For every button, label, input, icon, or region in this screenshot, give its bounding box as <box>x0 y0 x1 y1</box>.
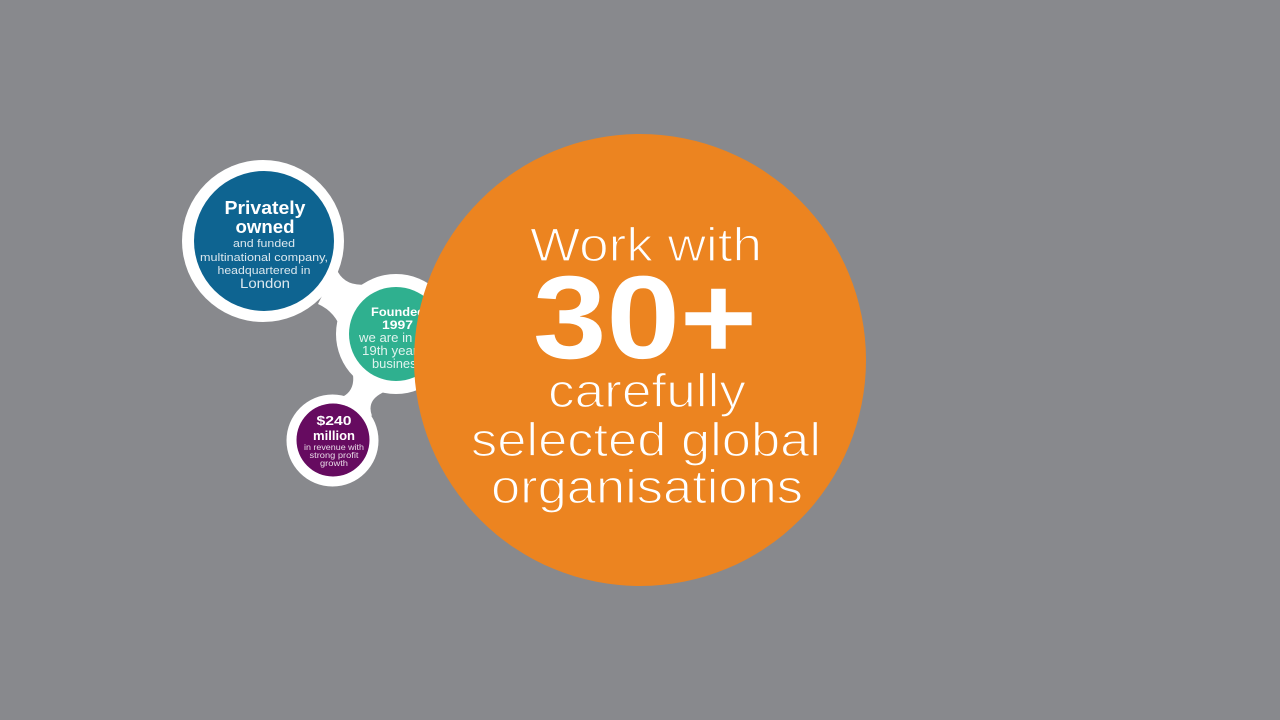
node: privately owned: owned <box>236 217 294 237</box>
panel: orange circle <box>414 134 866 586</box>
description: founded: 19th year of <box>362 344 433 358</box>
description: privately owned: multinational company, <box>200 252 328 264</box>
description: founded: we are in our <box>358 331 435 345</box>
heading: founded: Founded <box>371 305 425 319</box>
text: selected global: selected global <box>471 413 821 466</box>
description: founded: business <box>372 357 423 371</box>
description: revenue: growth <box>320 459 348 468</box>
description: revenue <box>304 443 364 468</box>
white connector network <box>318 268 384 416</box>
description: privately owned: London <box>240 275 290 291</box>
description: founded <box>358 331 435 371</box>
node: privately owned <box>182 160 344 322</box>
heading: revenue: $240 <box>316 413 352 428</box>
description: privately owned <box>200 238 328 291</box>
node: revenue: million <box>313 428 355 443</box>
description: privately owned: and funded <box>233 238 295 250</box>
heading: privately owned: Privately <box>224 198 306 218</box>
node: founded 1997: 1997 <box>382 318 413 332</box>
text: carefully: carefully <box>548 364 747 417</box>
node: revenue <box>286 394 378 486</box>
text: work with: Work with <box>530 218 762 271</box>
description: privately owned: headquartered in <box>218 265 310 277</box>
description: revenue: in revenue with <box>304 443 364 452</box>
text: organisations: organisations <box>491 460 803 513</box>
node: founded 1997 <box>336 274 456 394</box>
big number: 30+: 30+ <box>533 252 757 384</box>
description: revenue: strong profit <box>310 451 359 460</box>
